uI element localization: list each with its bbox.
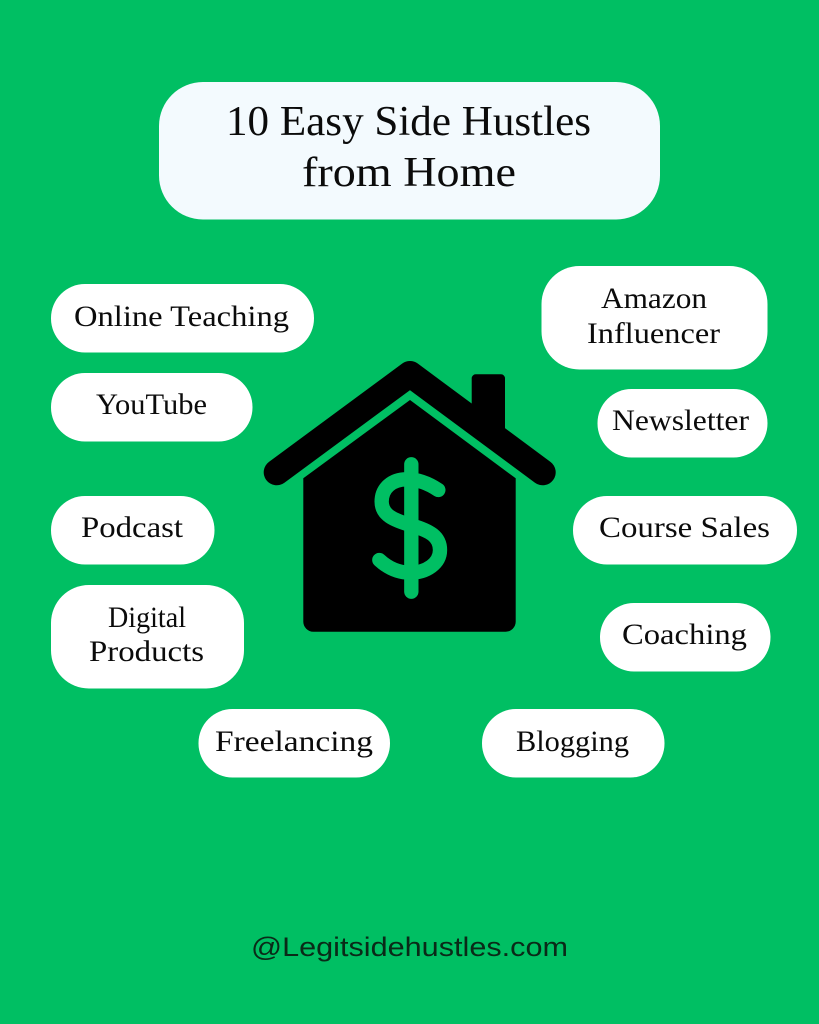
icon: house with dollar sign xyxy=(277,374,543,632)
pill: Online Teaching xyxy=(51,284,314,352)
title panel xyxy=(159,82,660,220)
pill: Newsletter: Newsletter xyxy=(612,404,749,437)
pill: Blogging xyxy=(482,709,664,778)
pill: Online Teaching: Online Teaching xyxy=(74,300,289,333)
pill: Freelancing: Freelancing xyxy=(215,725,373,758)
pill: Amazon Influencer: Amazon xyxy=(601,282,707,315)
pill: Podcast: Podcast xyxy=(81,511,184,544)
pill: Blogging: Blogging xyxy=(516,725,629,758)
pill: Coaching: Coaching xyxy=(622,618,747,651)
icon: house body xyxy=(303,400,516,632)
pill: Course Sales: Course Sales xyxy=(599,511,770,544)
pill: Amazon Influencer: Influencer xyxy=(587,317,720,350)
pill: Digital Products xyxy=(51,585,244,688)
icon: roof xyxy=(277,374,543,472)
pill: Freelancing xyxy=(198,709,390,778)
pill: YouTube: YouTube xyxy=(96,388,207,421)
pill: Digital Products: Products xyxy=(89,635,204,668)
title panel: 10 Easy Side Hustles xyxy=(226,99,591,145)
pill: Coaching xyxy=(600,603,770,672)
pill: Podcast xyxy=(51,496,214,564)
pill: YouTube xyxy=(51,373,252,442)
footer: website handle: @Legitsidehustles.com xyxy=(251,932,568,962)
title panel: from Home xyxy=(302,150,516,196)
icon: chimney xyxy=(472,374,505,440)
pill: Course Sales xyxy=(573,496,797,564)
pill: Digital Products: Digital xyxy=(108,601,186,634)
icon: dollar sign xyxy=(379,464,440,592)
pill: Newsletter xyxy=(598,389,768,458)
pill: Amazon Influencer xyxy=(542,266,768,370)
